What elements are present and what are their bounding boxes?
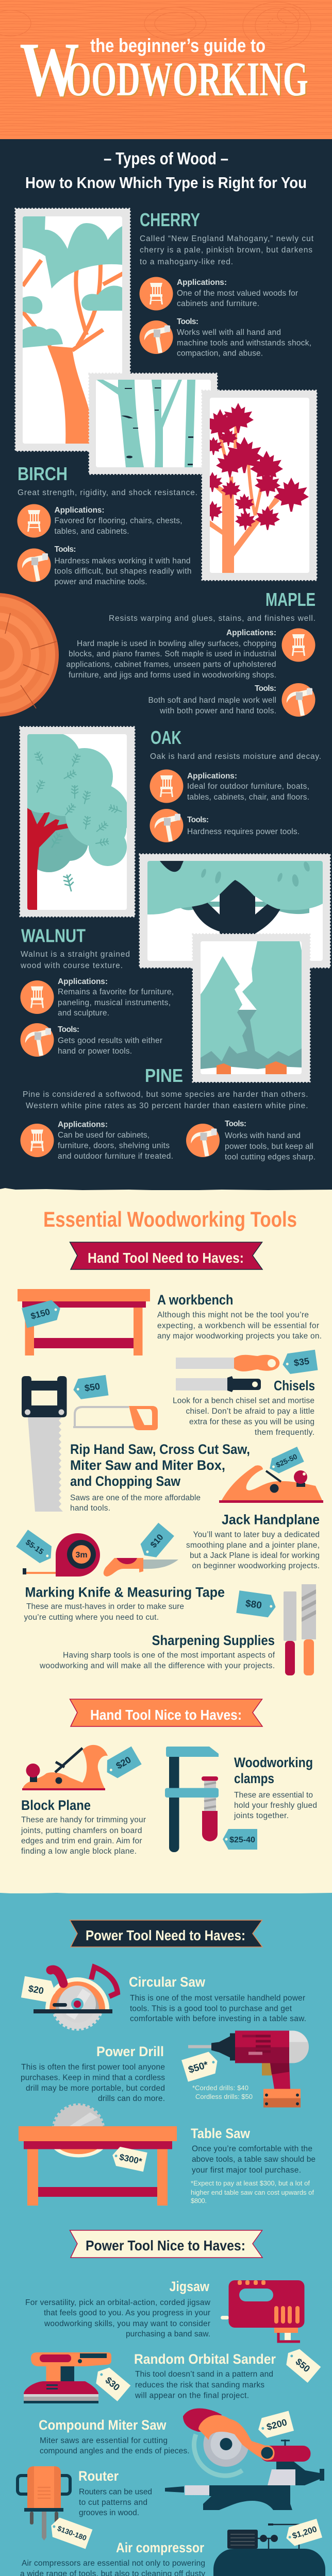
banner: power tool need to haves: Power Tool Need to Haves: [86,1927,245,1943]
text block: walnut: wood with course texture. [20,961,123,970]
text block: power drill: Power Drill [96,2044,164,2059]
text block: pine: Can be used for cabinets, [58,1131,150,1140]
text block: pine: and outdoor furniture if treated. [58,1152,173,1161]
price tag [236,1590,277,1618]
text block: chisels: extra for these as you will be using [189,1418,314,1426]
text block: block plane [21,1798,146,1856]
text block: pine: Tools: [225,1120,246,1128]
text block: maple: Hard maple is used in bowling alley surfaces, chopping [77,639,276,648]
price tag: $20 [27,1983,44,1996]
text block: walnut: Walnut is a straight grained [21,950,130,959]
text block: marking knife [24,1585,225,1622]
text block: jigsaw: For versatility, pick an orbital-action, corded jigsaw [25,2298,211,2307]
price tag: $50 [84,1381,101,1394]
text block: workbench: Although this might not be the tool you’re [157,1311,309,1319]
text block: jack handplane: You’ll want to later buy a dedicated [193,1530,320,1539]
text block: birch: Favored for flooring, chairs, chests, [55,516,182,526]
illustration: log cross-section [0,593,59,717]
text block: oak [150,727,321,842]
text block: sharpening: woodworking and will make all the difference with your projects. [39,1662,275,1670]
price tag: $150 [30,1307,51,1321]
text block: marking knife: you’re cutting where you need to cut. [24,1613,159,1622]
text block: sander [134,2351,276,2400]
icon: hammer [139,320,173,354]
icon: hammer [281,683,316,717]
price tag: $130-180 [56,2524,88,2542]
text block: power drill: This is often the first power tool anyone [21,2063,165,2072]
text block: cherry: Applications: [177,278,227,287]
text block: pine: tool cutting edges sharp. [225,1153,316,1161]
text block: pine [21,1065,316,1161]
text block: birch: Applications: [55,506,104,515]
text block: saws: and Chopping Saw [70,1473,181,1489]
icon: hammer [150,809,184,842]
panel: birch stamp [89,374,217,474]
price tag [47,2516,92,2549]
text block: jigsaw: that feels good to you. As you progress in your [44,2309,210,2317]
text block: block plane: edges and trim end grain. Aim for [21,1837,142,1845]
icon: circular saw [21,1967,118,2029]
text block: maple: Resists warping and glues, stains, and finishes well. [109,614,316,623]
title: W [20,27,79,112]
text block: maple: blocks, and piano frames. Soft maple is used in industrial [69,650,276,658]
text block: clamps: joints together. [234,1811,289,1820]
price tag: $25-40 [229,1836,255,1844]
icon: block plane [22,1745,142,1790]
banner: power tool nice to haves: Power Tool Nice to Haves: [86,2238,245,2253]
heading: types of wood [25,149,307,192]
text block: chisels [173,1378,315,1437]
banner: hand tool need to haves: Hand Tool Need to Haves: [88,1250,244,1266]
icon: chisels [176,1350,318,1392]
price tag: $80 [245,1598,262,1611]
text block: oak: OAK [151,727,181,748]
text block: maple: applications, cabinet frames, unseen parts of upholstered [66,660,276,669]
text block: power drill: purchases. Keep in mind that a cordless [21,2073,165,2082]
price tag: $35 [293,1356,310,1368]
text block: saws: Rip Hand Saw, Cross Cut Saw, [70,1442,250,1457]
text block: maple: Tools: [255,684,276,693]
title: W [21,28,80,113]
price tag [16,1530,57,1567]
icon: hand saw [22,1375,158,1512]
text block: saws [70,1442,250,1513]
text block: jigsaw: Jigsaw [169,2279,210,2294]
price tag [72,1375,108,1400]
text block: block plane: Block Plane [21,1798,91,1813]
text block: cherry: cabinets and furniture. [177,299,259,308]
text block: circular saw: This is one of the most versatile handheld power [130,1994,305,2003]
text block: router [78,2468,152,2517]
text block: birch: Great strength, rigidity, and shock resistance. [18,488,197,497]
text block: maple: with both power and hand tools. [159,707,276,715]
text block: table saw: Once you’re comfortable with the [192,2144,312,2154]
text block: router: Router [78,2468,119,2484]
text block: clamps: Woodworking [234,1755,313,1770]
price tag: $20 [114,1754,133,1771]
heading: types of wood: How to Know Which Type is Right for You [25,174,307,192]
text block: circular saw: comfortable with before investing in a table saw. [130,2014,306,2023]
text block: cherry: One of the most valued woods for [177,289,298,298]
text block: jigsaw [25,2279,211,2338]
panel: cherry stamp [15,209,130,451]
text block: walnut: Remains a favorite for furniture, [58,988,174,996]
text block: cherry: cherry is a pale, pinkish brown, but darkens [140,246,312,255]
text block: router: to cut patterns and [79,2498,147,2507]
text block: air compressor: Air compressors are essential not only to powering [22,2559,205,2568]
text block: maple [66,589,316,717]
icon: air compressor [213,2519,325,2576]
text block: birch [18,463,197,586]
text block: chisels: Look for a bench chisel set and mortise [173,1396,314,1405]
panel: maple stamp [202,391,317,580]
text block: circular saw [129,1974,306,2023]
price tag [22,1298,63,1328]
text block: miter saw: compound angles and the ends of pieces. [40,2447,190,2455]
text block: miter saw: Compound Miter Saw [39,2417,167,2433]
text block: cherry: machine tools and withstands shock, [177,339,311,347]
text block: clamps: clamps [234,1771,274,1786]
text block: pine: PINE [145,1065,183,1086]
title [20,27,309,113]
text block: walnut: Gets good results with either [58,1037,162,1045]
text block: pine: Works with hand and [225,1131,301,1140]
text block: maple: Both soft and hard maple work well [148,696,276,705]
text block: miter saw [39,2417,190,2455]
icon: sharpening files [236,1584,316,1675]
text block: air compressor: Air compressor [116,2540,204,2555]
text block: power drill: drills can do more. [98,2094,165,2103]
text block: pine: Western white pine rates as 30 percent harder than eastern white pine. [26,1101,308,1110]
text block: cherry: Tools: [177,317,198,326]
text block: block plane: joints, putting chamfers on board [21,1826,142,1835]
text block: cherry: Called “New England Mahogany,” newly cut [140,234,314,243]
banner: hand tool nice to haves: Hand Tool Nice to Haves: [90,1707,242,1723]
text block: pine: Pine is considered a softwood, but some species are harder than others. [23,1090,308,1099]
text block: router: grooves in wood. [79,2509,139,2517]
text block: saws: hand tools. [70,1504,110,1513]
text block: clamps: hold your freshly glued [234,1801,317,1810]
text block: sander: reduces the risk that sanding marks [135,2381,264,2389]
text block: birch: power and machine tools. [55,578,147,586]
text block: birch: tools difficult, but shapes readily with [55,567,192,576]
text block: walnut: hand or power tools. [58,1047,132,1056]
text block: workbench: expecting, a workbench will be essential for [157,1321,319,1330]
icon: marking knife [104,1523,178,1577]
text block: table saw: above tools, a table saw should be [192,2155,316,2164]
text block: table saw: Table Saw [191,2126,251,2141]
price tag [181,2050,221,2082]
text block: sander: This tool doesn’t sand in a pattern and [135,2370,273,2379]
text block: walnut: Applications: [58,977,108,986]
banner: power tool nice to haves [70,2230,262,2258]
icon: chair [21,980,54,1014]
text block: router: Routers can be used [79,2487,152,2497]
price tag: $5-15 [24,1538,45,1556]
footnote [192,2084,253,2100]
text block: block plane: These are handy for trimming your [21,1816,146,1824]
icon: hammer [186,1124,220,1157]
text block: sander: Random Orbital Sander [134,2351,276,2367]
text block: power drill: drill may be more portable, but corded [26,2084,165,2093]
panel: wood header [0,0,332,139]
text block: cherry: Works well with all hand and [177,328,281,337]
icon: chair [150,770,184,803]
text block: air compressor [20,2540,205,2576]
price tag [284,2519,322,2548]
price tag [110,2146,147,2172]
text block: jack handplane: Jack Handplane [222,1512,320,1527]
price tag: $10 [148,1532,165,1550]
price tag [223,1829,257,1850]
text block: jack handplane: but a Jack Plane is ideal for working [190,1551,320,1560]
text block: clamps: These are essential to [234,1791,313,1800]
text block: pine: furniture, doors, shelving units [58,1142,170,1150]
text block: walnut: and sculpture. [58,1009,109,1018]
icon: power drill [181,2031,309,2107]
banner: power tool need to haves [70,1920,262,1947]
text block: miter saw: Miter saws are essential for cutting [40,2436,168,2445]
text block: birch: tables, and cabinets. [55,527,129,536]
text block: oak: Tools: [187,816,209,824]
footnote: Cordless drills: $50 [195,2093,253,2100]
price tag [281,2345,321,2383]
text block: cherry [139,209,314,358]
footnote: *Corded drills: $40 [192,2084,248,2092]
icon: workbench [18,1289,150,1355]
text block: chisels: chisel. Don’t be afraid to pay a little [186,1407,314,1416]
price tag: $200 [265,2417,288,2432]
price tag: $25-50 [275,1452,298,1469]
text block: sharpening: Sharpening Supplies [152,1633,275,1648]
text block: table saw: $800. [191,2197,207,2205]
text block: saws: Miter Saw and Miter Box, [70,1458,225,1473]
text block: table saw: your first major tool purchase. [192,2166,301,2175]
text block: birch: BIRCH [18,463,68,484]
text block: oak: tables, cabinets, chair, and floors. [187,793,309,802]
icon: hacksaw [73,1406,158,1430]
text block: jack handplane: on beginner woodworking projects. [192,1562,320,1570]
price tag [266,1447,304,1476]
text block: table saw: *Expect to pay at least $300, but a lot of [191,2179,310,2187]
text block: cherry: compaction, and abuse. [177,349,263,358]
panel: pine stamp [193,934,310,1082]
banner: hand tool nice to haves [70,1699,262,1726]
icon: table saw [19,2105,177,2206]
text block: jigsaw: woodworking skills, you may want to consider [44,2319,210,2328]
text block: table saw: higher end table saw can cost upwards of [191,2189,314,2196]
panel: walnut stamp [140,854,330,968]
price tag: $50* [187,2059,210,2076]
text block: oak: Applications: [187,772,237,781]
text block: clamps [234,1755,317,1820]
text block: oak: Ideal for outdoor furniture, boats, [187,782,309,791]
icon: measuring tape: 3m [75,1551,88,1560]
text block: workbench: A workbench [157,1292,233,1308]
text block: chisels: Chisels [274,1378,315,1393]
banner: hand tool need to haves [70,1242,262,1269]
icon: clamp [165,1747,257,1852]
text block: walnut: Tools: [58,1025,79,1034]
text block: block plane: finding a low angle block plane. [21,1847,137,1856]
text block: sander: will appear on the final project. [135,2392,249,2400]
text block: sharpening: Having sharp tools is one of the most important aspects of [63,1651,275,1660]
text block: birch: Hardness makes working it with hand [55,556,191,566]
text block: power drill [21,2044,165,2103]
icon: jack plane [219,1447,323,1503]
icon: chair [18,504,51,538]
text block: walnut [20,925,174,1057]
text block: table saw [191,2126,316,2205]
price tag [21,1976,57,2003]
text block: circular saw: Circular Saw [129,1974,206,1990]
text block: maple: Applications: [226,629,276,637]
price tag: $30 [103,2375,122,2393]
text block: jigsaw: purchasing a band saw. [126,2330,210,2338]
text block: cherry: CHERRY [140,209,200,230]
price tag [281,1350,318,1375]
text block: jack handplane [186,1512,320,1570]
text block: workbench: any major woodworking projects you take on. [157,1332,322,1341]
heading: types of wood: – Types of Wood – [104,149,228,168]
text block: saws: Saws are one of the more affordable [70,1494,201,1502]
price tag [256,2411,294,2439]
text block: cherry: to a mahogany-like red. [140,258,233,266]
icon: hammer [18,548,51,582]
text block: walnut: paneling, musical instruments, [58,998,171,1007]
price tag [91,2364,130,2401]
text block: circular saw: tools. This is a good tool to purchase and get [130,2004,292,2013]
text block: marking knife: Marking Knife & Measuring Tape [25,1585,225,1600]
text block: maple: MAPLE [265,589,316,610]
text block: marking knife: These are must-haves in order to make sure [26,1602,184,1611]
icon: jigsaw [221,2280,321,2383]
text block: pine: Applications: [58,1120,108,1129]
text block: maple: furniture, and jigs and forms used in woodworking shops. [69,671,276,680]
title: the beginner’s guide to [90,35,265,56]
price tag [102,1747,142,1781]
text block: oak: Oak is hard and resists moisture and decay. [150,752,321,761]
text block: walnut: WALNUT [21,925,86,946]
text block: jack handplane: smoothing plane and a jointer plane, [186,1541,320,1550]
icon: chair [21,1124,54,1157]
price tag [137,1523,174,1562]
icon: measuring tape [16,1530,100,1577]
icon: orbital sander [24,2352,130,2403]
text block: workbench [157,1292,322,1341]
icon: chair [139,277,173,310]
price tag: $50 [293,2357,312,2374]
icon: router [18,2466,92,2549]
panel: oak stamp [11,727,135,917]
price tag: $300* [119,2152,143,2166]
price tag: $1,200 [291,2525,318,2541]
text block: sharpening [39,1633,275,1670]
text block: oak: Hardness requires power tools. [187,827,300,836]
text block: pine: power tools, but keep all [225,1142,313,1151]
icon: chair [281,629,316,662]
text block: birch: Tools: [55,545,76,554]
text block: chisels: them frequently. [255,1428,314,1437]
icon: compound miter saw [165,2409,324,2510]
icon: hammer [21,1023,54,1057]
